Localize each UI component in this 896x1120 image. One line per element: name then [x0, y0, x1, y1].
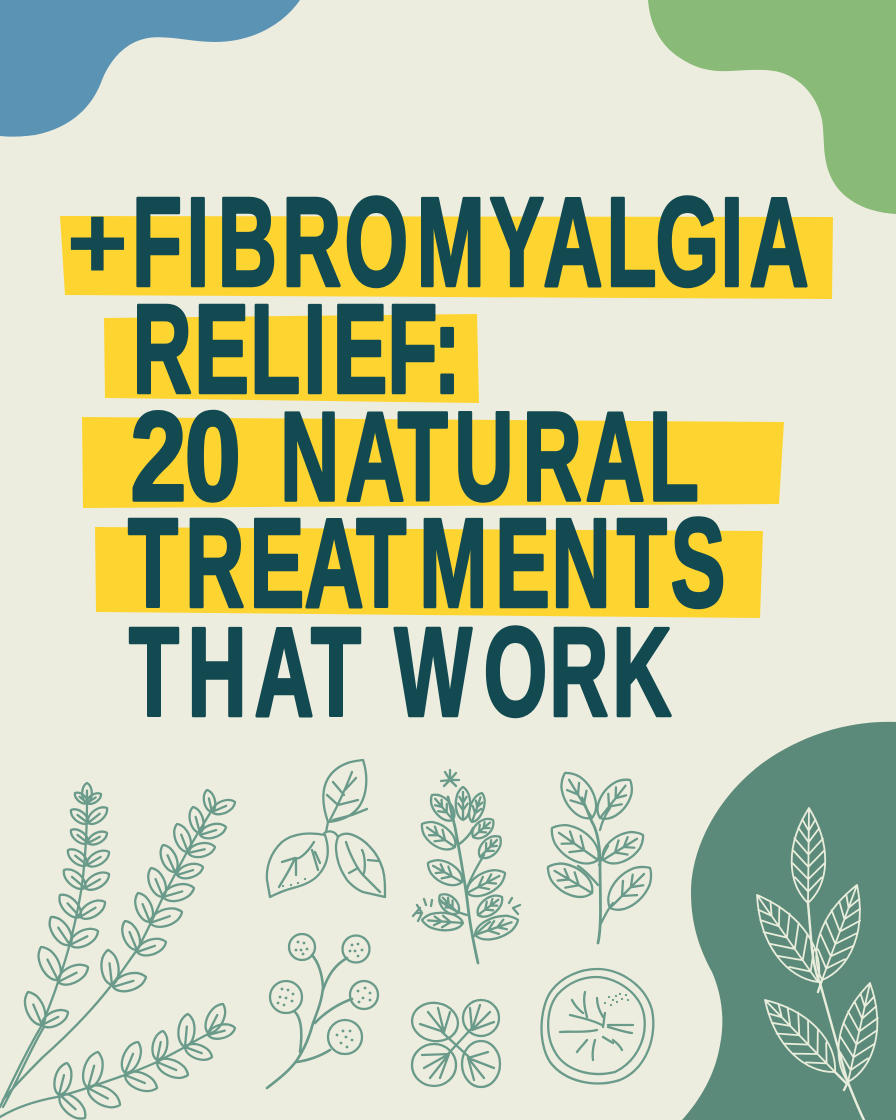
- icon: berry branch: [267, 934, 378, 1088]
- icon: four-petal clover: [409, 999, 500, 1087]
- title: NATURAL: [280, 386, 699, 527]
- icon: flowering herb: [413, 770, 522, 963]
- icon: sprig, low horizontal: [0, 1000, 237, 1120]
- blue corner blob: [0, 0, 300, 137]
- icon: three leaves: [267, 760, 385, 897]
- title: THAT WORK: [129, 602, 671, 743]
- title highlight bands: [60, 216, 833, 618]
- title: +: [67, 185, 128, 301]
- title: RELIEF:: [133, 279, 461, 420]
- dark green corner blob: [682, 722, 896, 1120]
- green corner blob: [648, 0, 896, 214]
- icon: citrus slice circle: [542, 969, 653, 1083]
- icon: six-leaf sprig: [541, 766, 661, 943]
- icon: large white leaf branch: [742, 808, 887, 1120]
- title: FIBROMYALGIA: [132, 172, 809, 313]
- title: 20: [130, 387, 241, 528]
- icon: sprig, upright: [0, 783, 112, 1107]
- title: [67, 172, 809, 743]
- icon: sprig, diagonal: [3, 789, 237, 1100]
- title: TREATMENTS: [128, 493, 725, 634]
